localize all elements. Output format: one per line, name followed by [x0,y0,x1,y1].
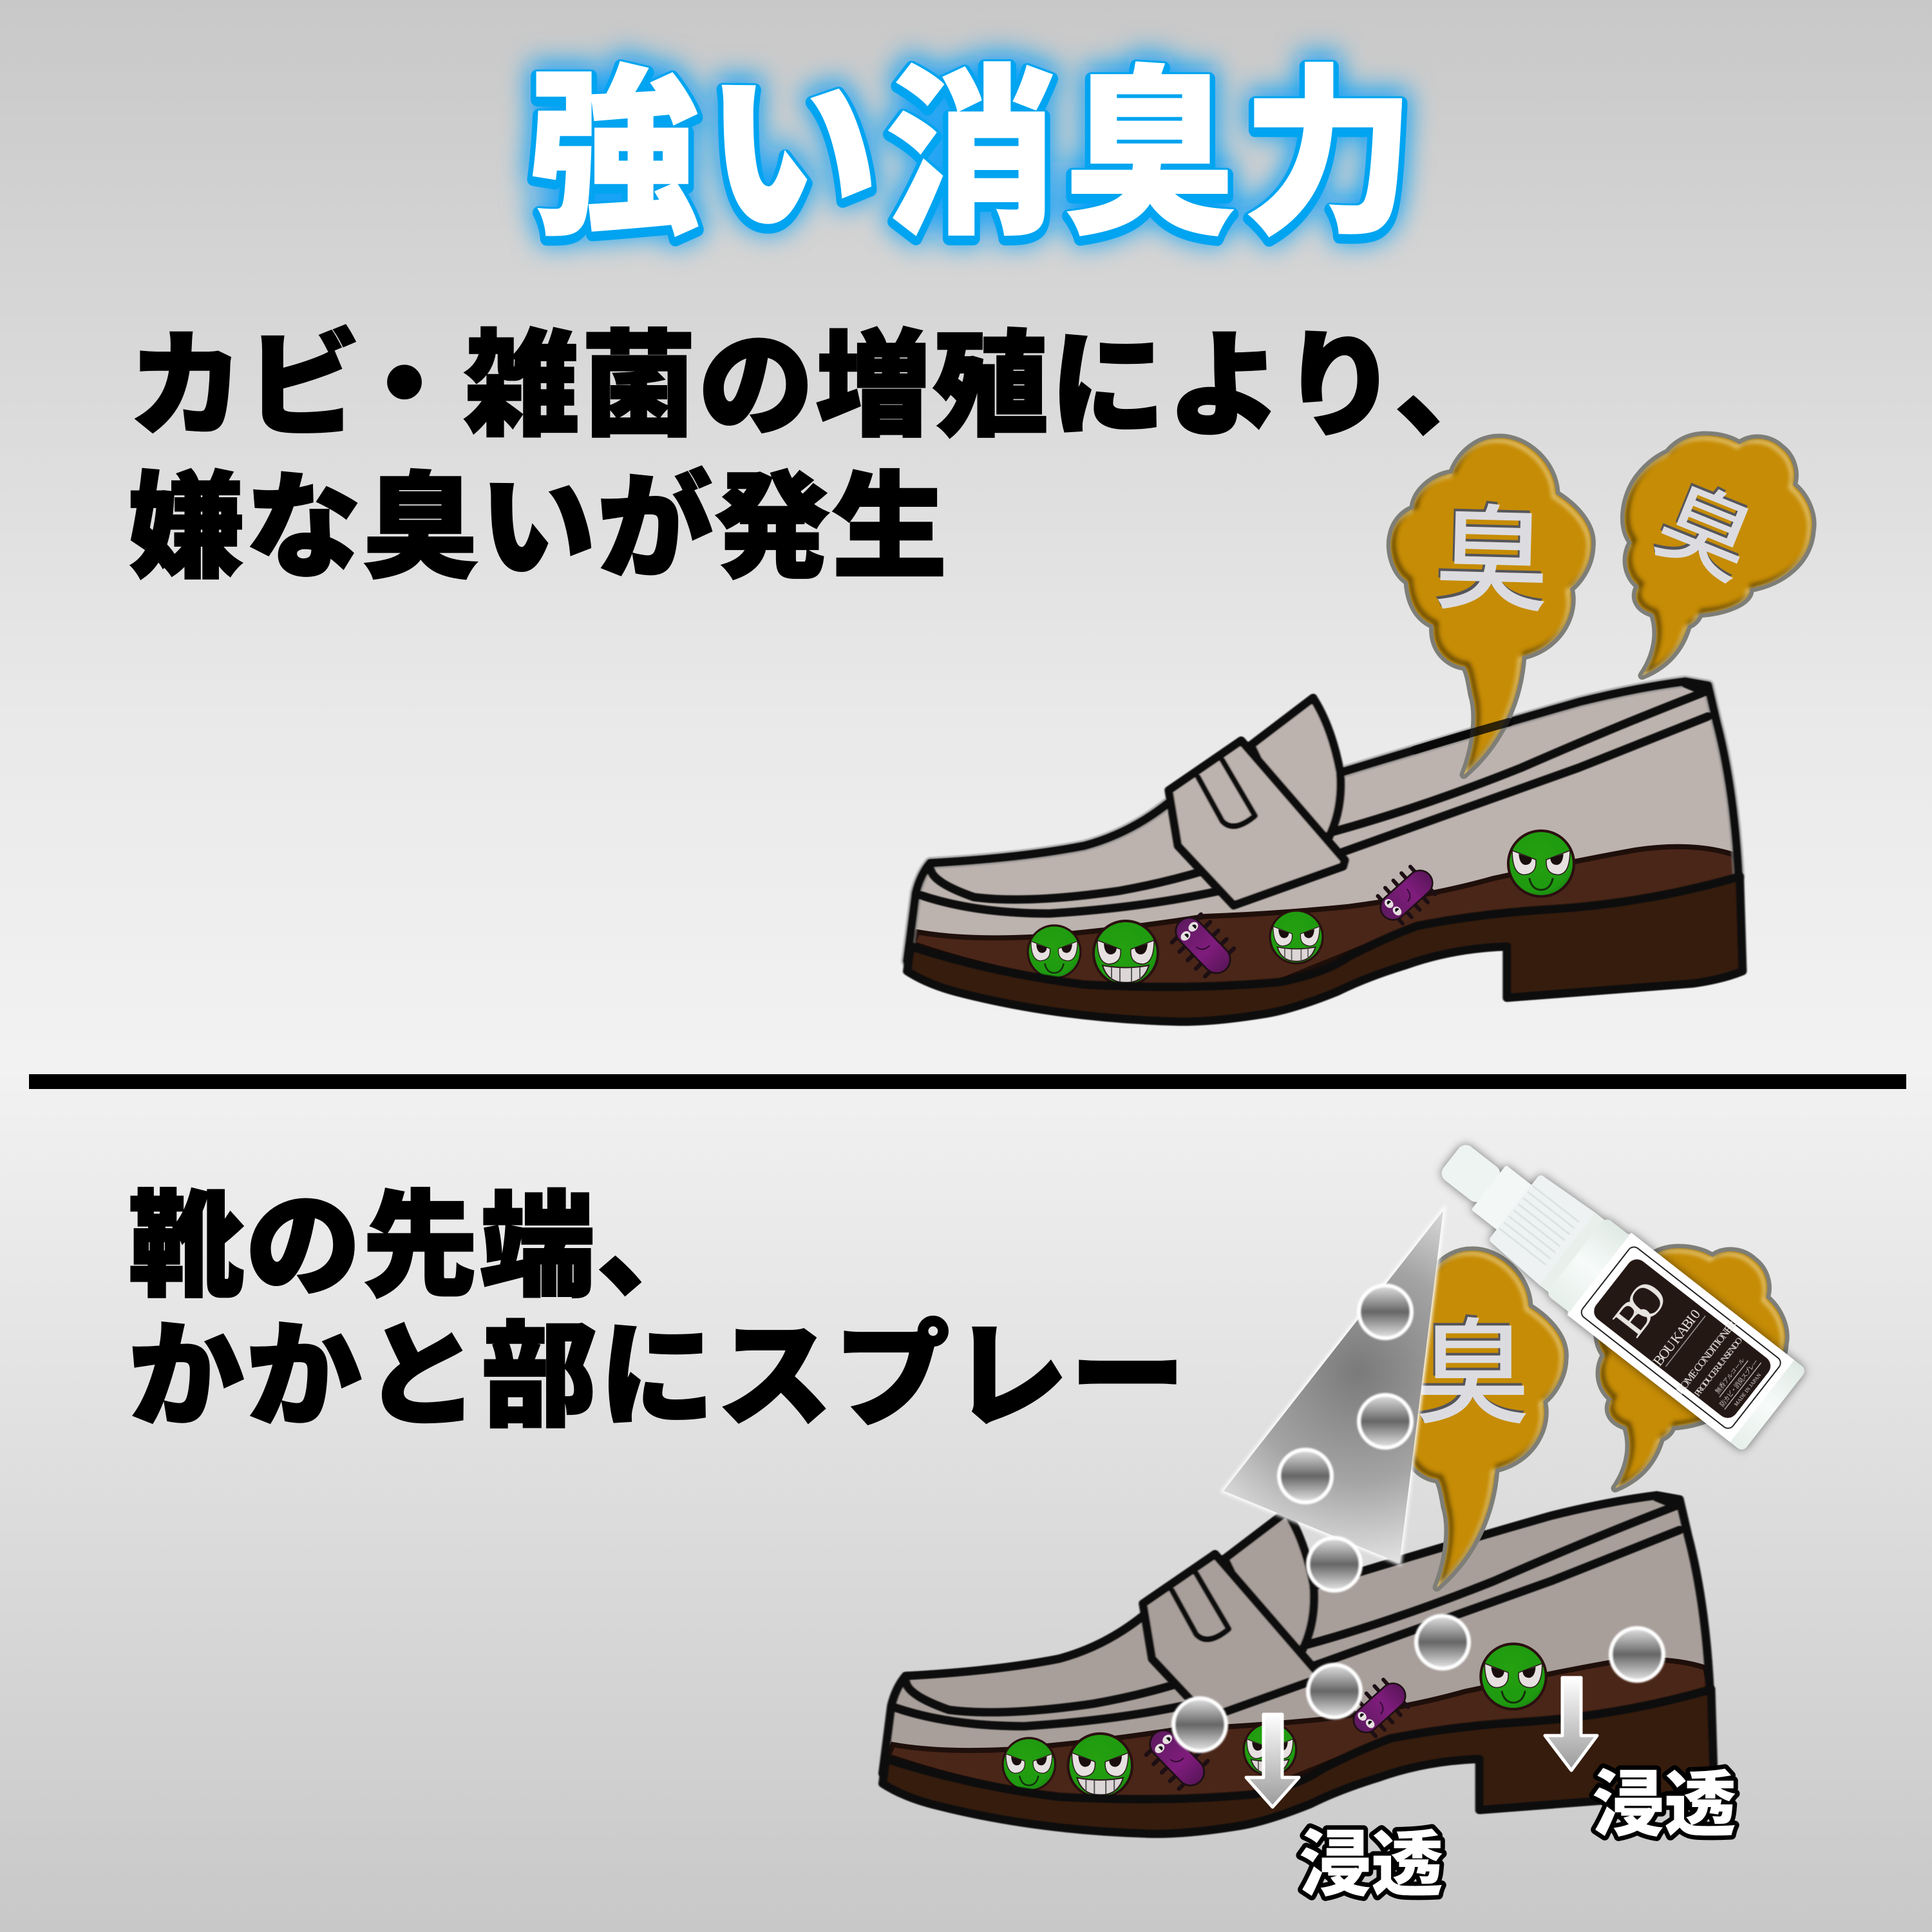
smell cloud left, second scene: 臭 [1416,1310,1530,1438]
arrow: penetration left [1246,1714,1299,1807]
bottle body [1535,1208,1807,1452]
smell cloud left: 臭 [1433,495,1551,626]
shoe sole [907,876,1743,1021]
shoe outline and seams [883,1495,1710,1773]
germ: green smile [1028,925,1081,978]
bottle nozzle and cap [1423,1122,1595,1285]
collar line crossing the smell tail [1415,722,1509,750]
bottle label: BOU KABI 0 [1650,1306,1703,1369]
germ: green grin [1068,1734,1132,1797]
illustration: shoe with germs [907,681,1743,1021]
divider [29,1074,1906,1089]
germ: green grin [1094,921,1158,985]
arrow: penetration right [1545,1678,1597,1770]
germ: purple bacillus [1164,907,1242,984]
title: 強い消臭力: 強い消臭力 [528,58,1414,261]
shoe upper [883,1495,1710,1797]
illustration: shoe treated with spray [883,1495,1714,1833]
smell cloud right: 臭 [1643,469,1767,598]
smell cloud left: 臭 [1431,493,1549,623]
smell cloud right: 臭 [1643,466,1766,595]
label: 浸透 left: 浸透 [1299,1824,1443,1905]
title: 強い消臭力: 強い消臭力 [528,54,1414,257]
smell cloud left, second scene: 臭 [1414,1307,1528,1435]
heading: solution text [129,1182,1185,1441]
heading: problem text [129,322,1512,592]
label: 浸透 right: 浸透 [1592,1765,1736,1845]
germ: green grin [1244,1723,1296,1776]
heading: problem text: カビ・雑菌の増殖により、 [129,322,1512,450]
spray cone [1224,1211,1443,1563]
smell cloud right, second scene [1595,1245,1788,1491]
germ: green smile [1481,1644,1546,1709]
insole [888,1660,1710,1799]
heading: solution text: 靴の先端、 [129,1182,712,1311]
insole [913,847,1739,987]
bottle label: 防カビ・消臭スプレー [1718,1358,1760,1408]
bottle label: HOME CONDITIONER [1674,1318,1739,1397]
shoe outline and seams [907,681,1739,961]
germ: green smile [1003,1738,1056,1790]
title: 強い消臭力: 強い消臭力 [528,54,1414,257]
spray droplets [1173,1285,1663,1751]
heading: solution text: かかと部にスプレー [129,1312,1185,1441]
bottle label: 無香アルコール [1714,1356,1747,1396]
shoe upper [907,681,1739,985]
shoe sole [883,1689,1714,1833]
bottle label: BO [1604,1271,1678,1346]
germ: purple bacillus [1139,1719,1215,1796]
bottle label [1567,1233,1794,1442]
smell cloud right [1622,433,1815,678]
heading: problem text: 嫌な臭いが発生 [129,464,947,592]
germ: green smile [1508,831,1574,896]
smell cloud left [1388,435,1594,777]
bottle label: PRODUCER JUNSENDO [1693,1336,1745,1399]
smell cloud left, second scene [1411,1246,1569,1592]
bottle label: MADE IN JAPAN [1733,1372,1763,1407]
germ: purple bacillus [1370,860,1443,931]
spray bottle [1419,1117,1807,1452]
germ: green grin [1270,911,1323,963]
germ: purple bacillus [1344,1673,1416,1743]
